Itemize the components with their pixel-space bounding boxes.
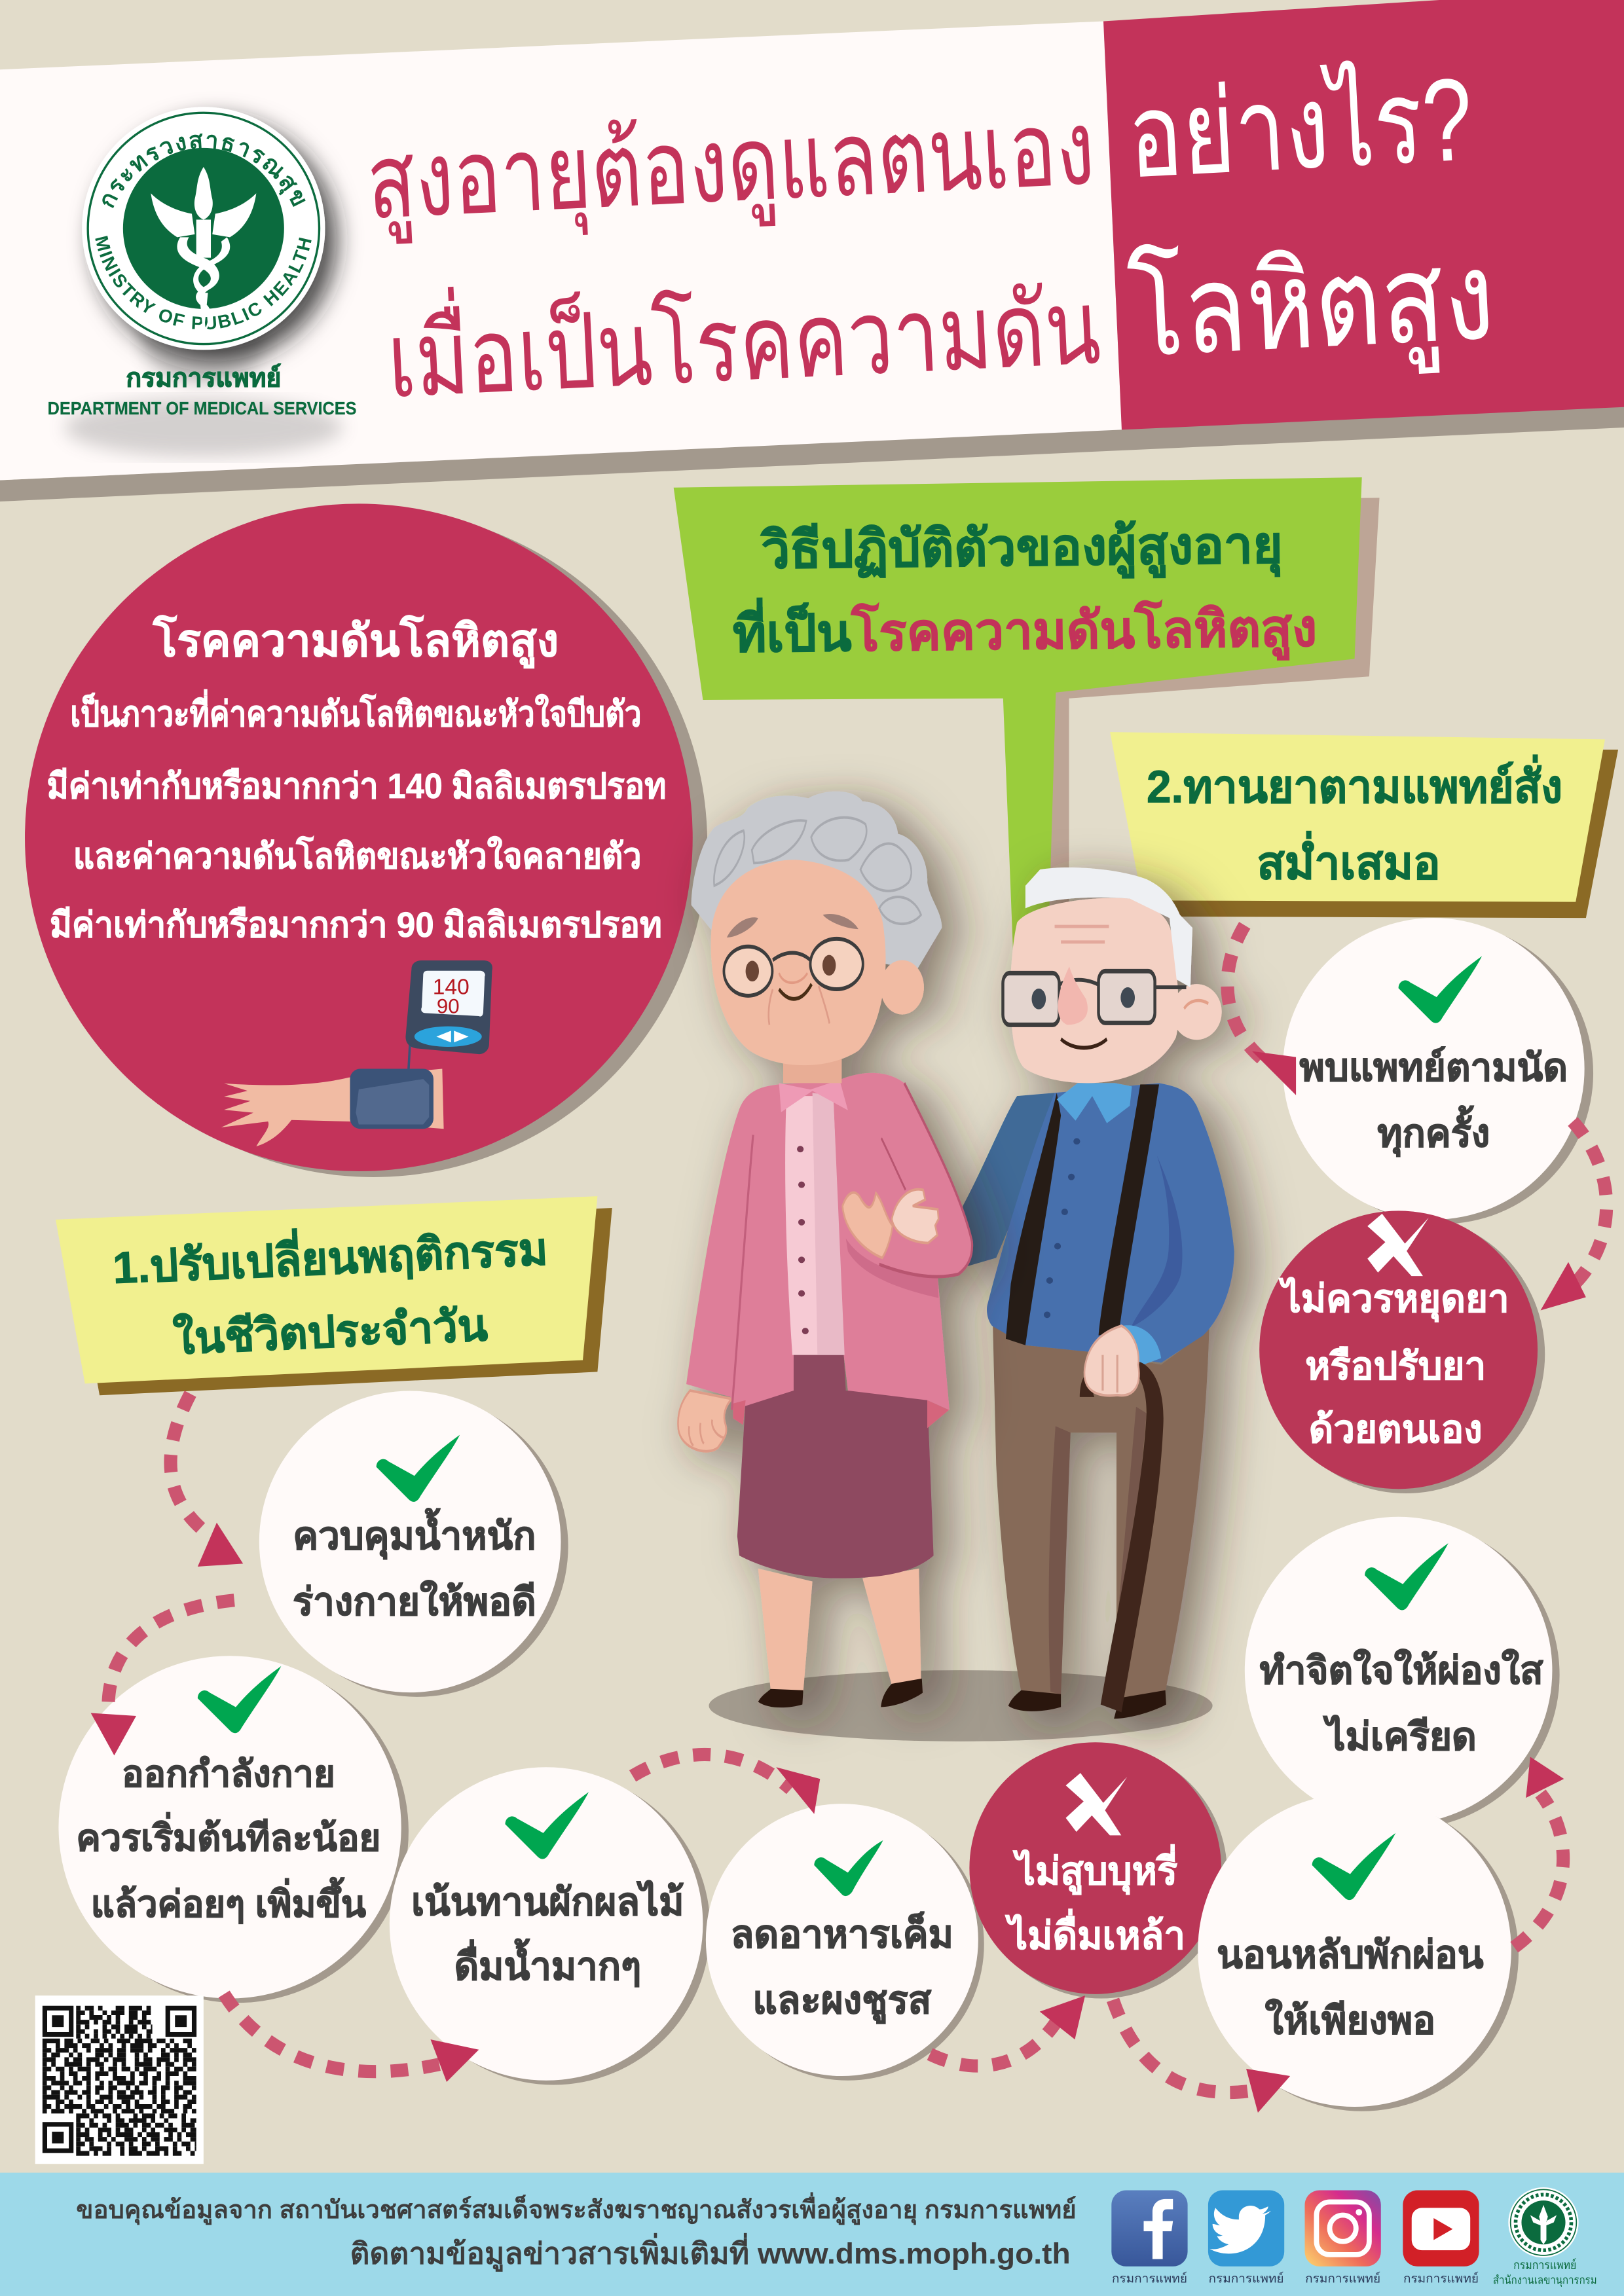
circle: exercise: แล้วค่อยๆ เพิ่มขึ้น xyxy=(91,1877,366,1924)
panel: step 1 label: 1.ปรับเปลี่ยนพฤติกรรม xyxy=(111,1217,549,1293)
circle: do not stop medicine: ไม่ควรหยุดยา xyxy=(1278,1277,1509,1323)
circle: no smoking or drinking xyxy=(969,1742,1227,1999)
circle: mental health: ทำจิตใจให้ผ่องใส xyxy=(1260,1649,1543,1692)
circle: weight control xyxy=(259,1391,568,1697)
icon: facebook: กรมการแพทย์ xyxy=(1112,2271,1187,2286)
icon: department logo xyxy=(1493,2187,1597,2287)
logo: Ministry of Public Health seal: DEPARTMENT OF MEDICAL SERVICES xyxy=(48,398,357,418)
circle: weight control: ควบคุมน้ำหนัก xyxy=(293,1508,536,1560)
circle: reduce salt xyxy=(706,1804,984,2081)
title: white-on-crimson: โลหิตสูง xyxy=(1125,227,1498,388)
circle: vegetables: เน้นทานผักผลไม้ xyxy=(411,1880,684,1923)
heading text xyxy=(732,516,1318,666)
hands on arm xyxy=(843,1190,938,1258)
seal emblem xyxy=(151,167,256,337)
icon: check xyxy=(1365,1543,1449,1610)
man xyxy=(963,867,1234,1719)
woman xyxy=(678,792,972,1707)
definition text xyxy=(47,689,666,945)
illustration: elderly couple xyxy=(678,792,1234,1741)
icon: check xyxy=(377,1435,460,1502)
panel: green heading with pointer xyxy=(674,477,1380,959)
panel: definition circle xyxy=(25,503,707,1177)
icon: department logo: กรมการแพทย์ xyxy=(1513,2258,1576,2272)
icon: twitter xyxy=(1208,2190,1284,2286)
circle: see doctor: พบแพทย์ตามนัด xyxy=(1300,1046,1568,1089)
definition title: โรคความดันโลหิตสูง xyxy=(153,615,559,669)
icon: check xyxy=(506,1792,589,1859)
icon: facebook xyxy=(1111,2190,1188,2286)
seal ring text: กระทรวงสาธารณสุข xyxy=(102,134,306,208)
icon: twitter: กรมการแพทย์ xyxy=(1209,2271,1284,2286)
panel: step 1 label: ในชีวิตประจำวัน xyxy=(172,1299,489,1364)
circle: mental health xyxy=(1245,1517,1560,1829)
panel: step 1 label xyxy=(56,1196,612,1395)
icon: instagram xyxy=(1304,2190,1381,2286)
circle: vegetables xyxy=(390,1767,710,2085)
icon: blood pressure monitor and arm cuff: 140 xyxy=(433,975,470,999)
arrows: dashed flow xyxy=(91,925,1606,2113)
ground shadow xyxy=(709,1670,1213,1741)
title: white-on-crimson: อย่างไร? xyxy=(1125,53,1475,202)
seal ring text xyxy=(95,134,312,330)
icon: blood pressure monitor and arm cuff xyxy=(221,960,492,1146)
circle: exercise: ออกกำลังกาย xyxy=(122,1753,335,1794)
circle: weight control: ร่างกายให้พอดี xyxy=(293,1580,536,1624)
header band xyxy=(0,0,1624,501)
circle: do not stop medicine: หรือปรับยา xyxy=(1305,1345,1486,1388)
circle: do not stop medicine: ด้วยตนเอง xyxy=(1309,1408,1483,1451)
icon: check xyxy=(1399,956,1482,1023)
circle: see doctor: ทุกครั้ง xyxy=(1377,1105,1490,1157)
circle: do not stop medicine xyxy=(1259,1211,1545,1493)
circle: no smoking or drinking: ไม่ดื่มเหล้า xyxy=(1005,1909,1185,1958)
icon: department logo: สำนักงานเลขานุการกรม xyxy=(1493,2274,1597,2287)
icon: cross xyxy=(1066,1773,1127,1835)
QR code xyxy=(35,1995,204,2164)
circle: sleep: ให้เพียงพอ xyxy=(1265,1998,1435,2042)
department name: กรมการแพทย์ xyxy=(126,363,281,392)
heading text: ที่เป็นโรคความดันโลหิตสูง xyxy=(732,592,1318,666)
circle: see doctor xyxy=(1283,918,1593,1224)
circle: reduce salt: ลดอาหารเค็ม xyxy=(731,1911,953,1956)
icon: check xyxy=(1312,1833,1395,1900)
title: dark-on-white: เมื่อเป็นโรคความดัน xyxy=(384,256,1103,419)
title: dark-on-white: สูงอายุต้องดูแลตนเอง xyxy=(365,89,1098,246)
title: dark-on-white xyxy=(365,89,1103,419)
panel: step 2 label: สม่ำเสมอ xyxy=(1257,831,1441,888)
circle: sleep xyxy=(1198,1793,1519,2111)
circle: exercise: ควรเริ่มต้นทีละน้อย xyxy=(76,1812,380,1859)
heading text: วิธีปฏิบัติตัวของผู้สูงอายุ xyxy=(760,516,1283,583)
circle: reduce salt: และผงชูรส xyxy=(752,1979,932,2024)
circle: sleep: นอนหลับพักผ่อน xyxy=(1217,1934,1484,1977)
man head xyxy=(1172,984,1222,1040)
definition text: และค่าความดันโลหิตขณะหัวใจคลายตัว xyxy=(73,835,641,876)
definition text: เป็นภาวะที่ค่าความดันโลหิตขณะหัวใจบีบตัว xyxy=(70,689,641,734)
icon: youtube xyxy=(1403,2190,1479,2286)
circle: mental health: ไม่เครียด xyxy=(1322,1714,1477,1758)
icon: cross xyxy=(1367,1214,1429,1276)
icon: check xyxy=(814,1840,883,1896)
seal ring text: MINISTRY OF PUBLIC HEALTH xyxy=(95,236,312,330)
definition text: มีค่าเท่ากับหรือมากกว่า 90 มิลลิเมตรปรอท xyxy=(50,905,662,945)
circle: vegetables: ดื่มน้ำมากๆ xyxy=(454,1938,641,1988)
footer bar: ติดตามข้อมูลข่าวสารเพิ่มเติมที่ www.dms.moph.go.th xyxy=(350,2232,1071,2272)
icon: blood pressure monitor and arm cuff: 90 xyxy=(437,995,460,1018)
icon: youtube: กรมการแพทย์ xyxy=(1403,2271,1479,2286)
circle: exercise xyxy=(58,1656,409,2003)
title: white-on-crimson xyxy=(1125,53,1498,388)
woman neck and head xyxy=(783,1054,841,1083)
icon: check xyxy=(198,1666,281,1733)
panel: step 2 label xyxy=(1110,732,1618,918)
logo: Ministry of Public Health seal xyxy=(48,100,357,463)
circle: no smoking or drinking: ไม่สูบบุหรี่ xyxy=(1012,1844,1177,1895)
footer text: ขอบคุณข้อมูลจาก สถาบันเวชศาสตร์สมเด็จพระสังฆราชญาณสังวรเพื่อผู้สูงอายุ กรมการแพทย์ xyxy=(76,2192,1077,2225)
panel: step 2 label: 2.ทานยาตามแพทย์สั่ง xyxy=(1147,755,1562,812)
footer bar xyxy=(0,2173,1624,2296)
definition text: มีค่าเท่ากับหรือมากกว่า 140 มิลลิเมตรปรอท xyxy=(47,767,666,806)
icon: instagram: กรมการแพทย์ xyxy=(1305,2271,1380,2286)
